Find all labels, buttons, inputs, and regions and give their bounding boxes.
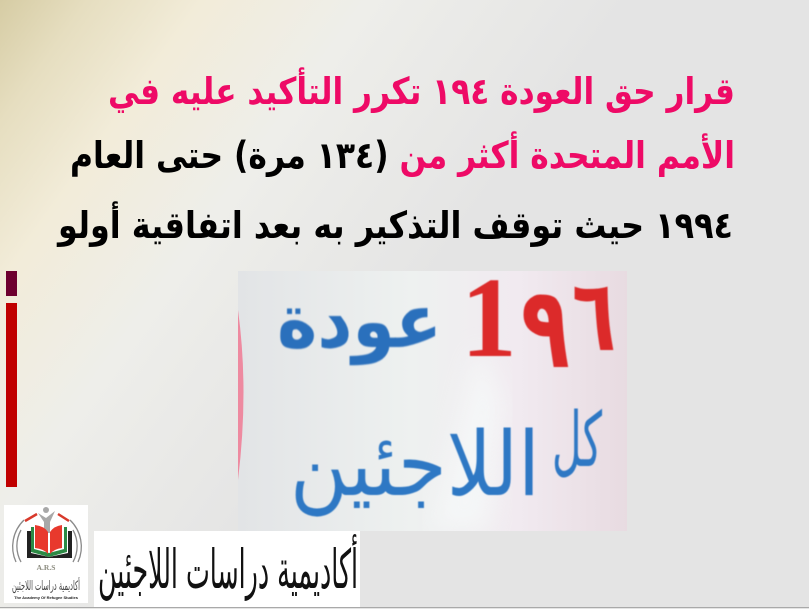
accent bars (6, 271, 17, 487)
title line 2: الأمم المتحدة أكثر من (١٣٤ مرة) حتى العام (70, 131, 735, 178)
title line 3: ١٩٩٤ حيث توقف التذكير به بعد اتفاقية أولو (56, 201, 733, 247)
light band on paper (454, 387, 494, 518)
text: أكاديمية دراسات اللاجئين (98, 534, 358, 601)
painted number 196: ٩ (521, 263, 570, 395)
bottom rule (0, 607, 809, 608)
pink paper edge (238, 310, 244, 480)
logo figure (38, 507, 55, 533)
logo card (4, 505, 88, 603)
logo english name: The Academy Of Refugee Studies (14, 595, 79, 600)
painted number 196: 1 (461, 255, 517, 381)
painted number 196 (469, 279, 614, 368)
painted words: all refugees: كل (552, 396, 602, 484)
photo paper (238, 271, 627, 531)
tall red bar (6, 303, 17, 487)
painted words: all refugees (294, 408, 603, 518)
photo: hand-painted sign (238, 255, 627, 531)
logo book (27, 525, 72, 558)
painted number 196: ٦ (572, 257, 616, 374)
banner background (94, 531, 360, 607)
title line 1: قرار حق العودة ١٩٤ تكرر التأكيد عليه في (108, 67, 735, 113)
logo red and green accents (25, 514, 69, 521)
logo initials: A.R.S (37, 563, 55, 572)
logo arabic name: أكاديمية دراسات اللاجئين (12, 577, 80, 594)
title text block (56, 67, 735, 247)
logo background (4, 505, 88, 603)
painted words: all refugees: اللاجئين (290, 413, 540, 518)
calligraphy banner (94, 531, 360, 607)
small maroon bar (6, 271, 17, 296)
logo arcs (13, 520, 81, 562)
painted word: return: عودة (277, 279, 442, 366)
